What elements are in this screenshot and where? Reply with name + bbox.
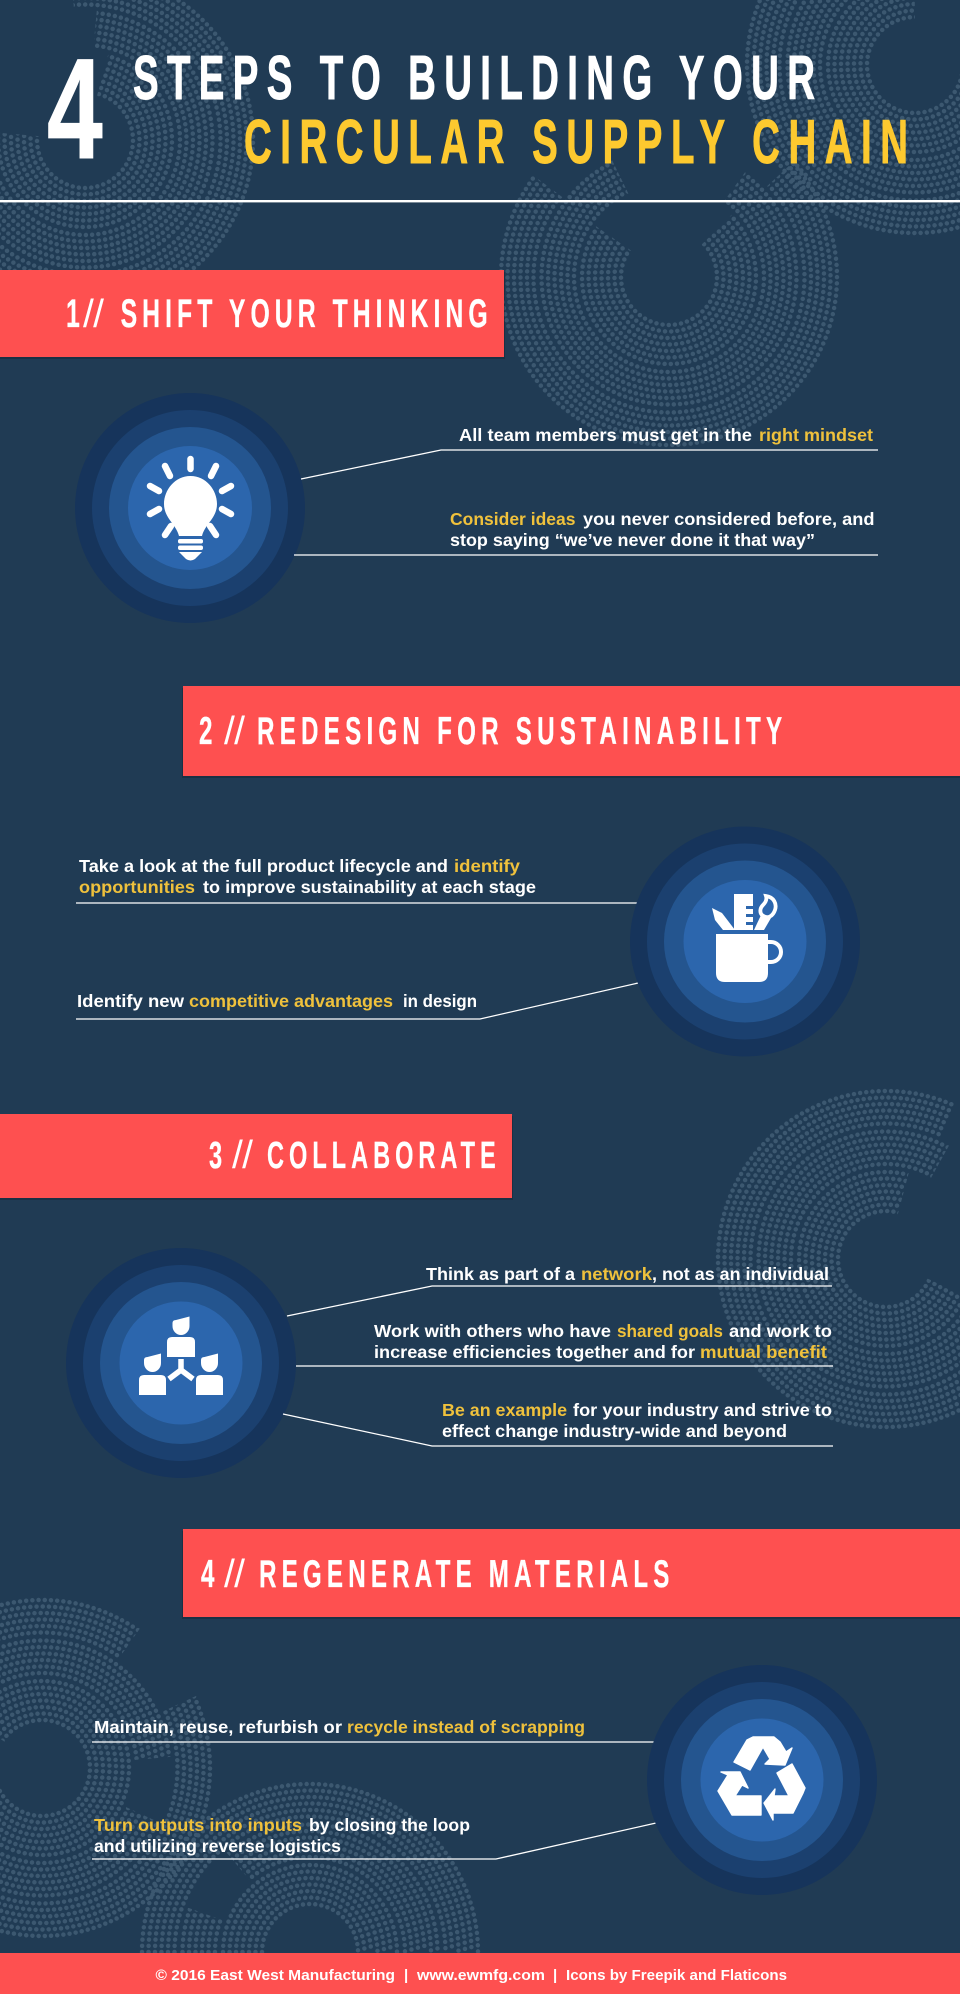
step 1 text: right mindset: All team members must get in the: [459, 425, 752, 445]
step 4 text: outputs into inputs: and utilizing reverse logistics: [94, 1836, 341, 1856]
footer bar: Icons by Freepik and Flaticons: [566, 1967, 787, 1984]
step 3 text: network: Think as part of a: [426, 1264, 575, 1284]
step 4 text: outputs into inputs: by closing the loop: [309, 1815, 470, 1835]
step 2 connector lines: [76, 903, 638, 1019]
banner 4: regenerate materials: [182, 1529, 960, 1619]
banner 2: redesign for sustainability: [182, 686, 960, 778]
step 1 text: right mindset: right mindset: [759, 425, 873, 445]
step 3 text: shared goals: Work with others who have: [374, 1321, 611, 1341]
step 3 text: shared goals: and work to: [729, 1321, 832, 1341]
banner 1: shift your thinking: 1: [66, 292, 80, 337]
footer bar: |: [404, 1967, 408, 1984]
title line 2: CIRCULAR SUPPLY CHAIN: [244, 107, 908, 176]
title: [47, 29, 908, 189]
step 3 text: shared goals: [374, 1321, 832, 1362]
step 2 text: competitive advantages: in design: [403, 991, 477, 1011]
step 1 icon: light bulb in concentric circles: [75, 393, 305, 623]
banner 2: redesign for sustainability: REDESIGN FOR SUSTAINABILITY: [257, 709, 782, 752]
step 2 text: identify opportunities: Take a look at the full product lifecycle and: [79, 856, 448, 876]
footer bar: [0, 1953, 960, 1994]
step 1 text: right mindset: [459, 425, 873, 445]
step 2 text: competitive advantages: competitive advantages: [189, 991, 393, 1011]
step 2 text: competitive advantages: Identify new: [77, 991, 184, 1011]
banner 2: redesign for sustainability: 2: [199, 709, 212, 752]
step 1 connector lines: [294, 450, 878, 555]
banner 3: collaborate: COLLABORATE: [267, 1133, 496, 1176]
step 3 icon: connected people: [66, 1248, 296, 1478]
step 4 text: outputs into inputs: [94, 1815, 470, 1856]
banner 3: collaborate: [0, 1114, 513, 1200]
step 3 text: be an example: for your industry and strive to: [573, 1400, 832, 1420]
step 3 text: shared goals: mutual benefit: [700, 1342, 827, 1362]
step 4 text: outputs into inputs: Turn outputs into inputs: [94, 1815, 302, 1835]
banner 3: collaborate: //: [232, 1134, 253, 1177]
header divider: [0, 200, 960, 202]
footer bar: |: [553, 1967, 557, 1984]
step 2 text: competitive advantages: [77, 991, 477, 1011]
step 2 text: identify opportunities: identify: [454, 856, 520, 876]
step 4 icon: recycle arrows: [647, 1665, 877, 1895]
step 4 text: recycle: Maintain, reuse, refurbish or: [94, 1717, 342, 1737]
banner 4: regenerate materials: REGENERATE MATERIALS: [259, 1552, 669, 1595]
step 1 text: consider ideas: stop saying “we’ve never done it that way”: [450, 530, 815, 550]
step 4 text: recycle: [94, 1717, 585, 1737]
banner 1: shift your thinking: SHIFT YOUR THINKING: [121, 292, 488, 337]
step 3 text: network: , not as an individual: [652, 1264, 829, 1284]
step 3 text: be an example: Be an example: [442, 1400, 567, 1420]
banner 3: collaborate: 3: [209, 1133, 222, 1176]
big number 4: 4: [47, 29, 103, 189]
footer bar: © 2016 East West Manufacturing: [156, 1967, 395, 1984]
step 3 text: be an example: [442, 1400, 832, 1441]
step 2 text: identify opportunities: to improve sustainability at each stage: [203, 877, 536, 897]
banner 4: regenerate materials: //: [224, 1553, 245, 1596]
step 3 text: shared goals: shared goals: [617, 1321, 723, 1341]
title line 1: STEPS TO BUILDING YOUR: [133, 43, 815, 112]
step 2 text: identify opportunities: opportunities: [79, 877, 195, 897]
step 1 text: consider ideas: [450, 509, 874, 550]
banner 2: redesign for sustainability: //: [224, 710, 245, 753]
banner 4: regenerate materials: 4: [201, 1552, 214, 1595]
banner 1: shift your thinking: [0, 270, 505, 359]
step 2 icon: mug with tools: [630, 826, 860, 1056]
step 4 text: recycle: recycle instead of scrapping: [347, 1717, 585, 1737]
banner 1: shift your thinking: //: [83, 293, 104, 336]
step 3 connector lines: [283, 1286, 833, 1446]
footer bar: www.ewmfg.com: [416, 1967, 545, 1984]
step 1 text: consider ideas: you never considered before, and: [583, 509, 874, 529]
step 3 text: network: [426, 1264, 829, 1284]
step 3 text: network: network: [581, 1264, 652, 1284]
step 1 text: consider ideas: Consider ideas: [450, 509, 576, 529]
step 3 text: shared goals: increase efficiencies together and for: [374, 1342, 695, 1362]
step 3 text: be an example: effect change industry-wide and beyond: [442, 1421, 787, 1441]
step 4 connector lines: [92, 1742, 656, 1859]
step 2 text: identify opportunities: [79, 856, 536, 897]
